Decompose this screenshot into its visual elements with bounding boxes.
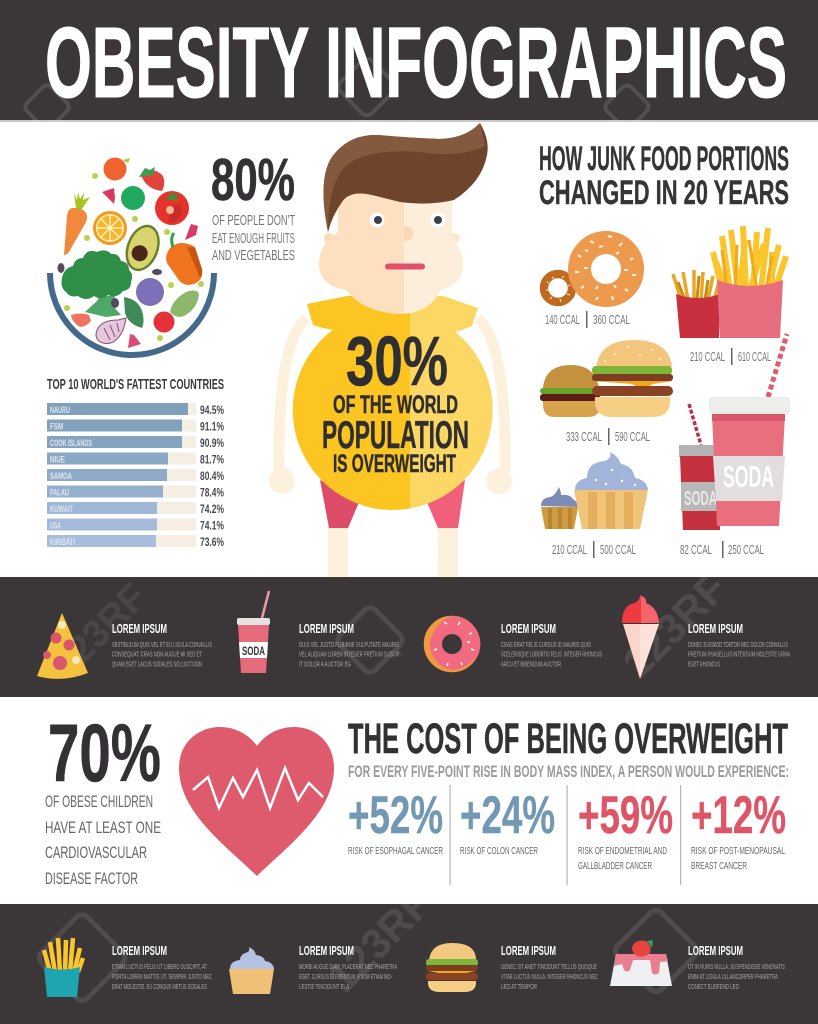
donut calories [545, 311, 630, 328]
text: population: POPULATION [322, 414, 469, 457]
icon: purple cabbage [136, 278, 164, 306]
item three body: CRAS ERAT FELIS CURSUS ID MAURIS QUIS [501, 640, 591, 649]
large soda: SODA [723, 459, 774, 494]
watermark: band one: 123RF [613, 564, 736, 686]
item eight text [688, 943, 785, 991]
item two text: LOREM IPSUM [299, 621, 354, 636]
item seven body: VITAE LUCTUS NULLA. INTEGER RHONCUS NEC [501, 972, 598, 981]
ears [324, 233, 460, 243]
shirt [293, 296, 493, 510]
text: 30 percent [322, 322, 469, 478]
mouth [385, 264, 425, 270]
icon: cake with strawberry [610, 940, 672, 986]
bar labels: FSM [50, 422, 63, 432]
food: donuts [544, 236, 636, 328]
stat: 80 percent [211, 147, 295, 264]
arms [279, 318, 505, 472]
icon: plate [50, 273, 214, 355]
chart heading: TOP 10 WORLD'S FATTEST COUNTRIES [47, 376, 224, 393]
item one body: QUAM EGET LACUS SODALES SOLLICITUDIN [112, 660, 202, 668]
bar values: 80.4% [200, 471, 224, 483]
item six text [299, 943, 397, 991]
bar labels: NIUE [50, 454, 65, 464]
item four text: LOREM IPSUM [688, 621, 743, 636]
icon: burger [426, 943, 478, 992]
watermark: header [23, 56, 651, 131]
text: is overweight: IS OVERWEIGHT [333, 450, 456, 478]
item one body [112, 640, 212, 668]
bar values: 91.1% [200, 422, 224, 434]
text: 70 percent description: OF OBESE CHILDREN [45, 793, 153, 811]
icon: bell pepper [166, 233, 202, 285]
item six body: EGET, CURSUS ELEMENTUM IPSUM ETIAM MO- [299, 972, 392, 981]
item eight body [688, 962, 785, 991]
icon: raspberry bottom [128, 334, 141, 348]
text: 80 percent description [212, 212, 295, 264]
bar values: 81.7% [200, 454, 224, 466]
item four body: EGET RHONCUS [688, 660, 720, 668]
bar labels: KIRIBATI [50, 537, 75, 547]
small straw [689, 404, 701, 445]
item seven body: DONEC SIT AMET TINCIDUNT TELLUS QUISQUE [501, 962, 597, 971]
text: 80 percent description: OF PEOPLE DON'T [212, 212, 295, 229]
item three body [501, 640, 602, 668]
bar values: 74.1% [200, 520, 224, 532]
fries calories [690, 348, 771, 365]
illustration: overweight man [269, 123, 512, 577]
icon: teal fries [44, 938, 83, 997]
icon: dark seeds [58, 263, 162, 308]
text: 80 percent description: AND VEGETABLES [212, 247, 295, 264]
text: 70 percent description: CARDIOVASCULAR [45, 844, 147, 862]
icon: strawberry small [71, 314, 91, 327]
soda calories [680, 541, 764, 558]
item five body: PORTA LOREM MATTIS UT. SEMPER JUSTO NEC [112, 972, 212, 981]
icon: seeds [64, 173, 204, 341]
item two body: IT DOLOR A AUCTOR EG [299, 660, 351, 668]
burger calories: 590 CCAL [615, 429, 650, 444]
stat: 80 percent: 80% [211, 147, 295, 213]
bars [47, 403, 188, 547]
fries calories: 610 CCAL [738, 349, 771, 364]
stat: esophageal [348, 786, 443, 857]
food: fries [673, 226, 786, 365]
header band [0, 0, 818, 131]
icon: broccoli [62, 250, 132, 317]
bar values: 90.9% [200, 438, 224, 450]
item six body: LESTIE TINCIDUNT ELA [299, 982, 349, 991]
item two body: DUIS VEL JUSTO FLIBIBNE VULPUTATE MAURIS [299, 640, 399, 649]
stat: colon [460, 786, 555, 857]
bar values: 74.2% [200, 504, 224, 516]
item six body: MORBI AUGUE DIAM, PLACERAT NEC PHARETRA [299, 962, 397, 971]
face [319, 190, 463, 314]
icon: orange [104, 158, 130, 180]
bar labels: USA [50, 520, 61, 530]
food: cupcakes [541, 452, 648, 558]
item one body: CONSEQUAT. CRAS NON AUGUE MI SED ET [112, 650, 202, 658]
bar labels [50, 405, 92, 547]
stat: breast [691, 786, 786, 872]
item four text [688, 621, 790, 668]
donut calories: 360 CCAL [593, 312, 630, 327]
heading: junk food portions [539, 140, 789, 212]
icon: soda cup: SODA [242, 644, 265, 658]
large donut [575, 236, 636, 300]
stat: endometrial [578, 786, 673, 872]
large soda [709, 397, 790, 526]
icon: soda cup [237, 591, 270, 673]
text: 70 percent description [45, 793, 161, 888]
item two text [299, 621, 401, 668]
text: 70 percent description: HAVE AT LEAST ONE [45, 819, 161, 837]
icon: pink donut [430, 616, 480, 670]
item one body: VESTIBULUM QUIS VEL ET EU LIGULA CONVALLIS [112, 640, 212, 649]
bar labels: COOK ISLANDS [50, 438, 92, 448]
stat: endometrial: +59% [578, 786, 673, 845]
bar labels: NAURU [50, 405, 70, 415]
icon: cupcake [229, 947, 274, 994]
soda calories: 250 CCAL [728, 542, 764, 557]
icon: pizza slice [37, 613, 88, 679]
watermark: band one [45, 564, 736, 686]
stat: 70 percent [45, 708, 161, 888]
icon: green ball [121, 186, 145, 210]
item two body: VEL ALIQUAM LOREM INTEGER PRETIUM SUSCIP- [299, 650, 401, 658]
large burger [592, 340, 673, 417]
icon: onion [96, 318, 126, 344]
eyes [370, 212, 446, 228]
panel: fruit and vegetable plate [50, 158, 214, 355]
icon: tomato [155, 191, 189, 225]
item two body [299, 640, 401, 668]
small burger [540, 365, 600, 417]
small fries [673, 270, 720, 338]
bar labels: KUWAIT [50, 504, 73, 514]
icon: orange slice [93, 211, 127, 245]
shorts [320, 480, 465, 528]
item three body: SCELERISQUE LOBORTIS FELIS. INTEGER RHONCUS [501, 650, 602, 658]
bar values: 73.6% [200, 537, 224, 549]
item five body: ERAT MOLESTIE, EU CONGUE METUS SODALES [112, 982, 207, 991]
watermark: band two: 123RF [318, 879, 441, 1001]
item eight text: LOREM IPSUM [688, 943, 743, 958]
cupcake calories: 210 CCAL [552, 542, 587, 557]
stat: 70 percent: 70% [48, 708, 161, 799]
text: of the world: OF THE WORLD [333, 391, 458, 419]
fries calories: 210 CCAL [690, 349, 725, 364]
icon: ice cream cone [622, 595, 659, 679]
large fries [713, 226, 786, 338]
icon: carrot [64, 192, 90, 255]
bar values: 94.5% [200, 405, 224, 417]
item five body: ETIAM LUCTUS FELIS UT LIBERO SUSCIPIT, AT [112, 962, 207, 971]
small cupcake [541, 487, 578, 529]
burger calories [566, 428, 650, 445]
hair [324, 123, 488, 232]
food: sodas [679, 334, 790, 558]
stats: cancer risk [348, 785, 786, 885]
icon: strawberry [139, 167, 164, 191]
bar values [200, 405, 224, 549]
large straw [768, 334, 787, 397]
stat: endometrial: GALLBLADDER CANCER [578, 860, 652, 872]
stat: endometrial: RISK OF ENDOMETRIAL AND [578, 845, 667, 857]
small soda [679, 445, 720, 530]
item five text: LOREM IPSUM [112, 943, 167, 958]
large cupcake [574, 452, 648, 529]
stat: esophageal: +52% [348, 786, 443, 845]
bar tracks [47, 403, 196, 547]
item six text: LOREM IPSUM [299, 943, 354, 958]
stat: esophageal: RISK OF ESOPHAGAL CANCER [348, 845, 443, 857]
item seven text: LOREM IPSUM [501, 943, 556, 958]
cupcake calories [552, 541, 636, 558]
icon: avocado [119, 220, 166, 276]
item three text: LOREM IPSUM [501, 621, 556, 636]
item six body [299, 962, 397, 991]
item seven text [501, 943, 598, 991]
text: 80 percent description: EAT ENOUGH FRUITS [212, 230, 295, 247]
band: snack items [0, 564, 818, 697]
bar labels: SAMOA [50, 471, 72, 481]
cupcake calories: 500 CCAL [600, 542, 636, 557]
item three text [501, 621, 602, 668]
watermark: band one: 123RF [45, 576, 155, 686]
stat: colon: RISK OF COLON CANCER [460, 845, 538, 857]
icon: leaf dark [124, 297, 144, 328]
nose [404, 226, 414, 241]
food: burgers [540, 340, 673, 445]
icon: heart with pulse [179, 727, 334, 876]
small donut [544, 274, 572, 302]
icon: radish [154, 312, 174, 332]
stat: colon: +24% [460, 786, 555, 845]
item seven body [501, 962, 598, 991]
item one text: LOREM IPSUM [112, 621, 167, 636]
burger calories: 333 CCAL [566, 429, 602, 444]
small soda: SODA [684, 488, 717, 510]
icon: leaf right [170, 291, 199, 317]
text: 30 percent: 30% [346, 322, 448, 400]
bar values: 78.4% [200, 488, 224, 500]
watermark: band two [36, 879, 700, 1004]
icon: raspberry [102, 188, 115, 204]
chart: top 10 fattest countries [47, 376, 224, 549]
item eight body: CONECT ELEIFEND LEO [688, 982, 739, 991]
item seven body: LEO AT TEMPOR [501, 982, 537, 991]
text: 70 percent description: DISEASE FACTOR [45, 870, 138, 888]
item five text [112, 943, 212, 991]
band: more snack items [0, 879, 818, 1024]
item four body [688, 640, 790, 668]
item three body: ARCU ET BIBENDUM AUCTOR [501, 660, 561, 668]
soda calories: 82 CCAL [680, 542, 712, 557]
hands [269, 468, 512, 494]
legs [328, 525, 458, 577]
stat: breast: BREAST CANCER [691, 860, 747, 872]
item one text [112, 621, 212, 668]
icon: raspberry right [185, 224, 198, 240]
item five body [112, 962, 212, 991]
bar labels: PALAU [50, 488, 69, 498]
donut calories: 140 CCAL [545, 312, 580, 327]
